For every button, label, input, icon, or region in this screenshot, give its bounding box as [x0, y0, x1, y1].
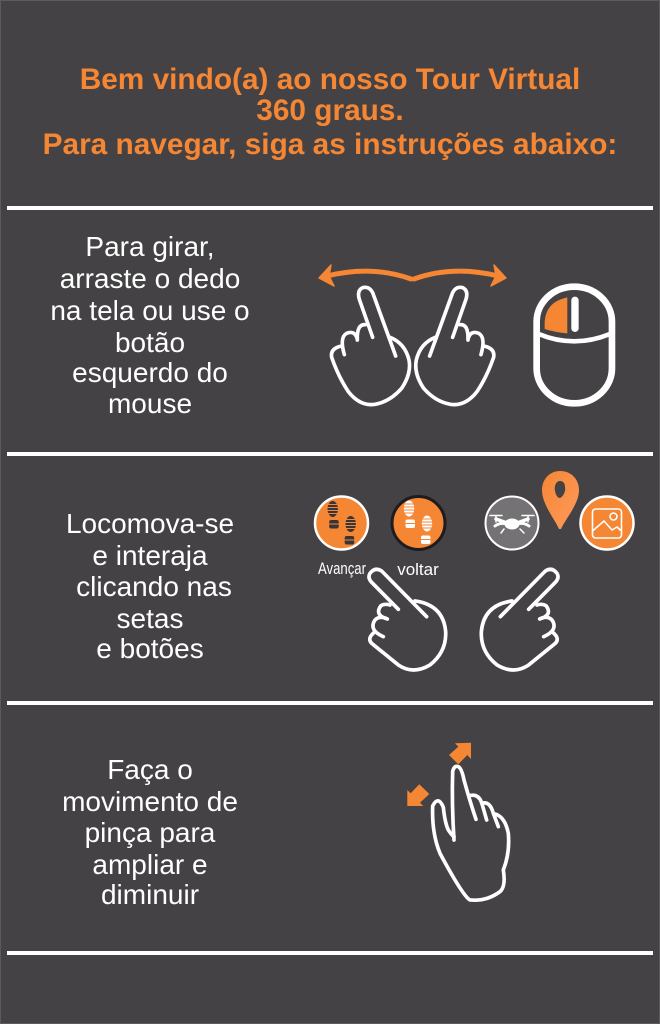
text block: pinça: Faça o — [107, 754, 193, 785]
text block: girar: botão — [115, 327, 185, 358]
icon: swiping hands — [331, 287, 494, 405]
icon: pinch arrow up-right — [449, 743, 471, 764]
left hand — [331, 287, 410, 405]
right pointing hand — [481, 569, 558, 670]
text block: girar: arraste o dedo — [60, 263, 240, 294]
button: voltar — [392, 496, 445, 579]
text block: locomova-se: Locomova-se — [66, 508, 234, 539]
text block: locomova-se: clicando nas — [76, 571, 232, 602]
icon: pointing hands — [369, 569, 558, 670]
icon: pinch arrow down-left — [407, 784, 429, 806]
left pointing hand — [369, 569, 446, 670]
title: Bem vindo(a) ao nosso Tour Virtual — [80, 63, 580, 96]
button: avançar: Avançar — [318, 560, 366, 578]
right hand — [416, 287, 494, 405]
text block: locomova-se — [66, 508, 234, 664]
text block: pinça: pinça para — [85, 817, 216, 848]
title: Para navegar, siga as instruções abaixo: — [43, 128, 617, 161]
text block: locomova-se: e botões — [96, 633, 204, 664]
icon: swipe arrows — [319, 265, 506, 286]
button: drone — [486, 496, 538, 550]
button: avançar — [315, 496, 368, 578]
text block: girar: Para girar, — [85, 231, 215, 262]
text block: pinça: movimento de — [62, 786, 238, 817]
text block: locomova-se: e interaja — [92, 540, 208, 571]
text block: locomova-se: setas — [117, 603, 183, 634]
text block: girar: esquerdo do — [72, 357, 228, 388]
button: image — [580, 496, 634, 550]
icon: pinch hand — [433, 766, 509, 900]
text block: girar — [50, 231, 250, 419]
icon: map pin — [542, 471, 579, 529]
button: voltar: voltar — [397, 560, 439, 579]
icon: mouse — [537, 287, 612, 403]
title: 360 graus. — [256, 94, 404, 127]
text block: pinça — [62, 754, 238, 910]
text block: girar: mouse — [108, 388, 192, 419]
text block: pinça: ampliar e — [92, 849, 208, 880]
text block: pinça: diminuir — [101, 879, 199, 910]
title — [43, 63, 617, 161]
text block: girar: na tela ou use o — [50, 295, 250, 326]
